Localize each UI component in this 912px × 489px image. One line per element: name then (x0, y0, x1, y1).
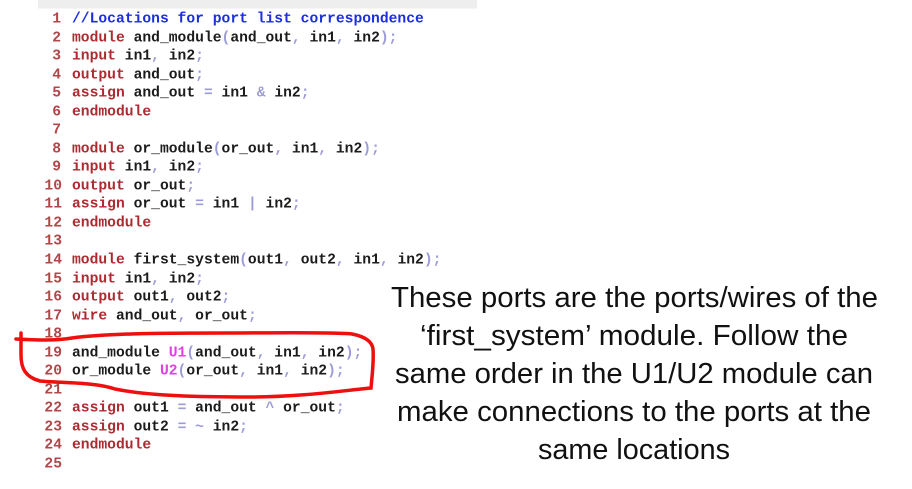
red hand-drawn circle around lines 19 and 20 (16, 333, 373, 397)
verilog code listing: endmodule (72, 216, 151, 232)
verilog code listing: assign out1 = and_out ^ or_out; (72, 401, 345, 417)
line numbers: 12 (44, 216, 62, 232)
verilog code listing: //Locations for port list correspondence (72, 12, 424, 28)
line numbers: 23 (44, 420, 62, 436)
line numbers: 5 (52, 86, 61, 102)
verilog code listing: input in1, in2; (72, 160, 204, 176)
line numbers: 14 (44, 253, 62, 269)
verilog code listing: module first_system(out1, out2, in1, in2); (72, 253, 441, 269)
line numbers: 4 (52, 68, 61, 84)
verilog code listing: module and_module(and_out, in1, in2); (72, 31, 397, 47)
verilog code listing: output and_out; (72, 68, 204, 84)
line numbers: 19 (44, 346, 62, 362)
line numbers: 8 (52, 142, 61, 158)
verilog code listing: or_module U2(or_out, in1, in2); (72, 364, 345, 380)
line numbers: 16 (44, 290, 62, 306)
verilog code listing: assign out2 = ~ in2; (72, 420, 248, 436)
line numbers: 2 (52, 31, 61, 47)
verilog code listing (72, 12, 441, 454)
explanatory caption: same locations (538, 434, 730, 466)
verilog code listing: endmodule (72, 105, 151, 121)
line numbers: 10 (44, 179, 62, 195)
line numbers: 6 (52, 105, 61, 121)
line numbers: 11 (44, 197, 62, 213)
verilog code listing: wire and_out, or_out; (72, 309, 257, 325)
explanatory caption: These ports are the ports/wires of the (391, 282, 878, 314)
top grey toolbar band (38, 0, 477, 8)
line numbers: 13 (44, 234, 62, 250)
line numbers: 15 (44, 272, 62, 288)
explanatory caption (391, 282, 878, 466)
line numbers: 20 (44, 364, 62, 380)
line numbers: 7 (52, 123, 61, 139)
verilog code listing: output out1, out2; (72, 290, 230, 306)
line numbers: 18 (44, 327, 62, 343)
verilog code listing: assign and_out = in1 & in2; (72, 86, 310, 102)
explanatory caption: make connections to the ports at the (397, 396, 871, 428)
verilog code listing: output or_out; (72, 179, 195, 195)
line numbers: 25 (44, 457, 62, 473)
line numbers: 3 (52, 49, 61, 65)
verilog code listing: input in1, in2; (72, 49, 204, 65)
line numbers: 24 (44, 438, 62, 454)
verilog code listing: assign or_out = in1 | in2; (72, 197, 301, 213)
line numbers: 9 (52, 160, 61, 176)
line numbers: 21 (44, 383, 62, 399)
line numbers (44, 12, 62, 473)
line numbers: 22 (44, 401, 62, 417)
line numbers: 1 (52, 12, 61, 28)
explanatory caption: same order in the U1/U2 module can (395, 358, 873, 390)
verilog code listing: module or_module(or_out, in1, in2); (72, 142, 380, 158)
explanatory caption: ‘first_system’ module. Follow the (420, 320, 848, 352)
verilog code listing: input in1, in2; (72, 272, 204, 288)
verilog code listing: endmodule (72, 438, 151, 454)
verilog code listing: and_module U1(and_out, in1, in2); (72, 346, 362, 362)
line numbers: 17 (44, 309, 62, 325)
